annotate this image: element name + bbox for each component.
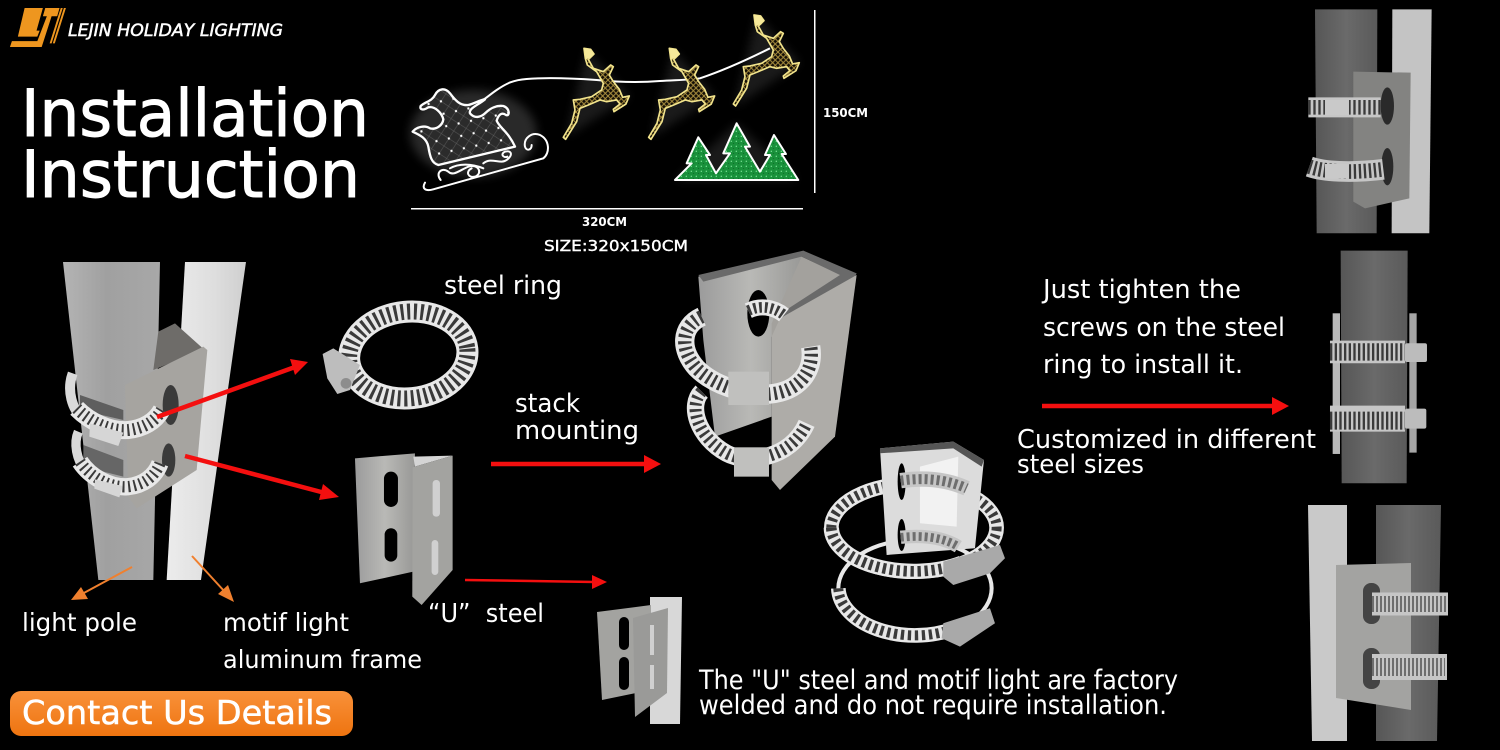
back plate xyxy=(698,253,803,437)
top edge xyxy=(698,251,857,320)
title: Instruction xyxy=(21,138,360,213)
company name: LEJIN HOLIDAY LIGHTING xyxy=(68,21,283,41)
open bracket with rings xyxy=(831,442,1005,647)
slot band xyxy=(748,307,784,315)
arrow: small U steel xyxy=(465,575,607,589)
lower band rear xyxy=(76,432,85,470)
customized text: steel sizes xyxy=(1017,450,1144,480)
trees xyxy=(675,123,798,180)
arrow: light pole xyxy=(71,567,132,600)
sleigh body xyxy=(413,89,515,165)
customized text: Customized in different xyxy=(1017,425,1316,455)
slot xyxy=(747,290,769,337)
title xyxy=(21,77,369,213)
upper ring front xyxy=(831,528,962,571)
label: U steel: “U” steel xyxy=(428,599,544,629)
label: stack mounting: mounting xyxy=(515,416,639,446)
screw xyxy=(341,378,351,389)
arrow: motif frame xyxy=(192,556,234,602)
icon: logo mark xyxy=(10,8,66,47)
pole shadow lower xyxy=(83,445,123,477)
photo: rear view mounted xyxy=(1308,505,1448,741)
inner wall xyxy=(772,257,842,337)
lower band xyxy=(80,462,160,487)
inner bands xyxy=(901,479,967,488)
clamps xyxy=(728,372,769,405)
size label: SIZE:320x150CM xyxy=(544,237,688,255)
main mounted photo xyxy=(63,262,246,580)
clamps xyxy=(89,423,123,446)
sleigh runner and scrolls xyxy=(424,134,548,190)
dimension: width: 320CM xyxy=(582,215,627,229)
logo xyxy=(10,8,283,47)
upper band xyxy=(685,317,811,394)
stacked mounting bracket xyxy=(685,251,857,490)
U steel xyxy=(355,453,453,605)
deer 3 xyxy=(733,15,799,106)
factory welded note: The "U" steel and motif light are factory xyxy=(698,665,1178,696)
motif light illustration xyxy=(410,15,800,190)
arrow: to steel ring xyxy=(157,359,308,417)
pole xyxy=(63,262,160,580)
clamp xyxy=(323,348,360,394)
upper band rear xyxy=(70,373,83,418)
factory welded note: welded and do not require installation. xyxy=(699,690,1167,721)
label: steel ring: steel ring xyxy=(444,271,562,301)
lower ring front xyxy=(838,588,955,635)
steel ring xyxy=(323,306,472,404)
instruction text: screws on the steel xyxy=(1043,313,1285,343)
photo: front view mounted xyxy=(1308,9,1432,233)
upper ring rear xyxy=(831,484,997,572)
label: light pole: light pole xyxy=(22,608,137,637)
deer 1 xyxy=(563,48,629,139)
deer 2 xyxy=(649,48,715,139)
aluminum frame xyxy=(167,262,246,580)
bracket interior xyxy=(880,442,984,555)
photo: side view mounted xyxy=(1330,251,1427,483)
lower band xyxy=(696,392,807,458)
deer and tree glow xyxy=(567,15,800,180)
label: stack mounting: stack xyxy=(515,389,580,419)
clamps xyxy=(943,545,1005,585)
label: motif light aluminum frame: motif light xyxy=(223,608,349,637)
arrow: to U steel xyxy=(185,456,339,500)
right side face xyxy=(772,275,857,490)
lower ring xyxy=(838,540,992,637)
instruction text: ring to install it. xyxy=(1043,350,1243,380)
arrow: stack mounting xyxy=(491,455,661,473)
dimension: height: 150CM xyxy=(823,106,868,120)
instruction text: Just tighten the xyxy=(1041,275,1241,305)
arrow: tighten xyxy=(1042,397,1289,415)
small U steel on frame xyxy=(597,597,682,724)
pole shadow upper xyxy=(80,395,123,420)
bracket channel xyxy=(153,323,204,370)
slots xyxy=(163,385,179,425)
rope xyxy=(468,48,770,105)
band xyxy=(345,306,472,404)
bracket plate xyxy=(125,347,207,508)
label: motif light aluminum frame: aluminum frame xyxy=(223,645,422,674)
contact button: Contact Us Details xyxy=(22,693,332,732)
upper band xyxy=(77,408,162,430)
sleigh glow xyxy=(410,90,537,177)
slots xyxy=(898,463,906,500)
title: Installation xyxy=(21,77,369,152)
